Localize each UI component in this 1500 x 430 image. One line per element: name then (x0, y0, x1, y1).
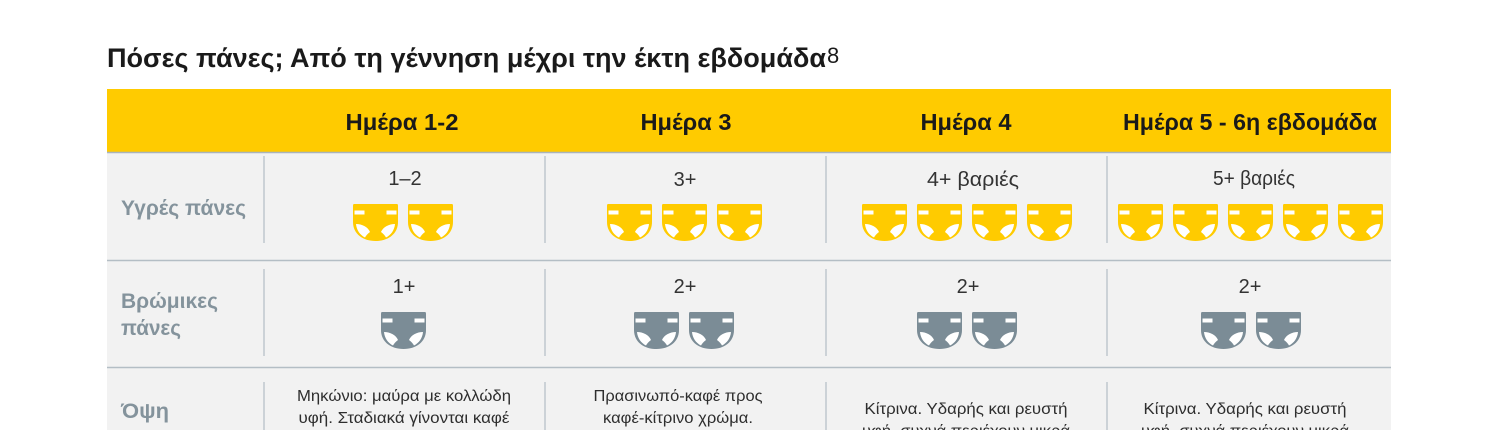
table (107, 89, 1391, 430)
icons: yellow diapers (353, 204, 1383, 241)
count: 5+ heavy: 5+ βαριές (1213, 168, 1295, 190)
text: day 3: Πρασινωπό-καφέ προς (594, 388, 763, 405)
count: 1-2: 1–2 (388, 168, 422, 190)
text: day 5 to week 6: Κίτρινα. Υδαρής και ρευστή (1144, 401, 1346, 418)
icons: grey diapers (381, 312, 1301, 349)
row label: wet diapers: Υγρές πάνες (121, 197, 246, 220)
row: dirty diapers (121, 276, 1301, 349)
text: day 3 (594, 388, 763, 427)
text: day 1-2: Μηκώνιο: μαύρα με κολλώδη (297, 388, 511, 405)
count: 2+ day 3: 2+ (674, 276, 696, 298)
row label: dirty diapers: Βρώμικες (121, 290, 218, 313)
count: 1+: 1+ (393, 276, 415, 298)
count: 4+ heavy: 4+ βαριές (927, 169, 1019, 191)
table body background (107, 153, 1391, 430)
heading: day 4: Ημέρα 4 (920, 109, 1012, 135)
count: 2+ day 5: 2+ (1239, 276, 1261, 298)
row: wet diapers (121, 168, 1383, 241)
heading: day 3: Ημέρα 3 (640, 109, 732, 135)
count: 3+: 3+ (674, 169, 696, 191)
text: day 4 (862, 401, 1070, 430)
text: day 1-2 (297, 388, 511, 430)
title: Πόσες πάνες; Από τη γέννηση μέχρι την έκτη εβδομάδα (107, 43, 826, 73)
text: day 4: Κίτρινα. Υδαρής και ρευστή (864, 401, 1068, 418)
heading: day 1-2: Ημέρα 1-2 (346, 109, 458, 135)
heading: day 5 to week 6: Ημέρα 5 - 6η εβδομάδα (1123, 109, 1377, 135)
row label: appearance: Όψη (120, 400, 169, 423)
count: 2+ day 4: 2+ (957, 276, 979, 298)
header band (107, 89, 1391, 152)
row label second line: πάνες (121, 317, 181, 340)
text: day 1-2: υφή. Σταδιακά γίνονται καφέ (298, 410, 510, 427)
text: day 5 to week 6 (1141, 401, 1349, 430)
title footnote marker: 8 (827, 43, 839, 68)
row: stool appearance (120, 388, 1349, 430)
text: day 3: καφέ-κίτρινο χρώμα. (603, 410, 753, 427)
